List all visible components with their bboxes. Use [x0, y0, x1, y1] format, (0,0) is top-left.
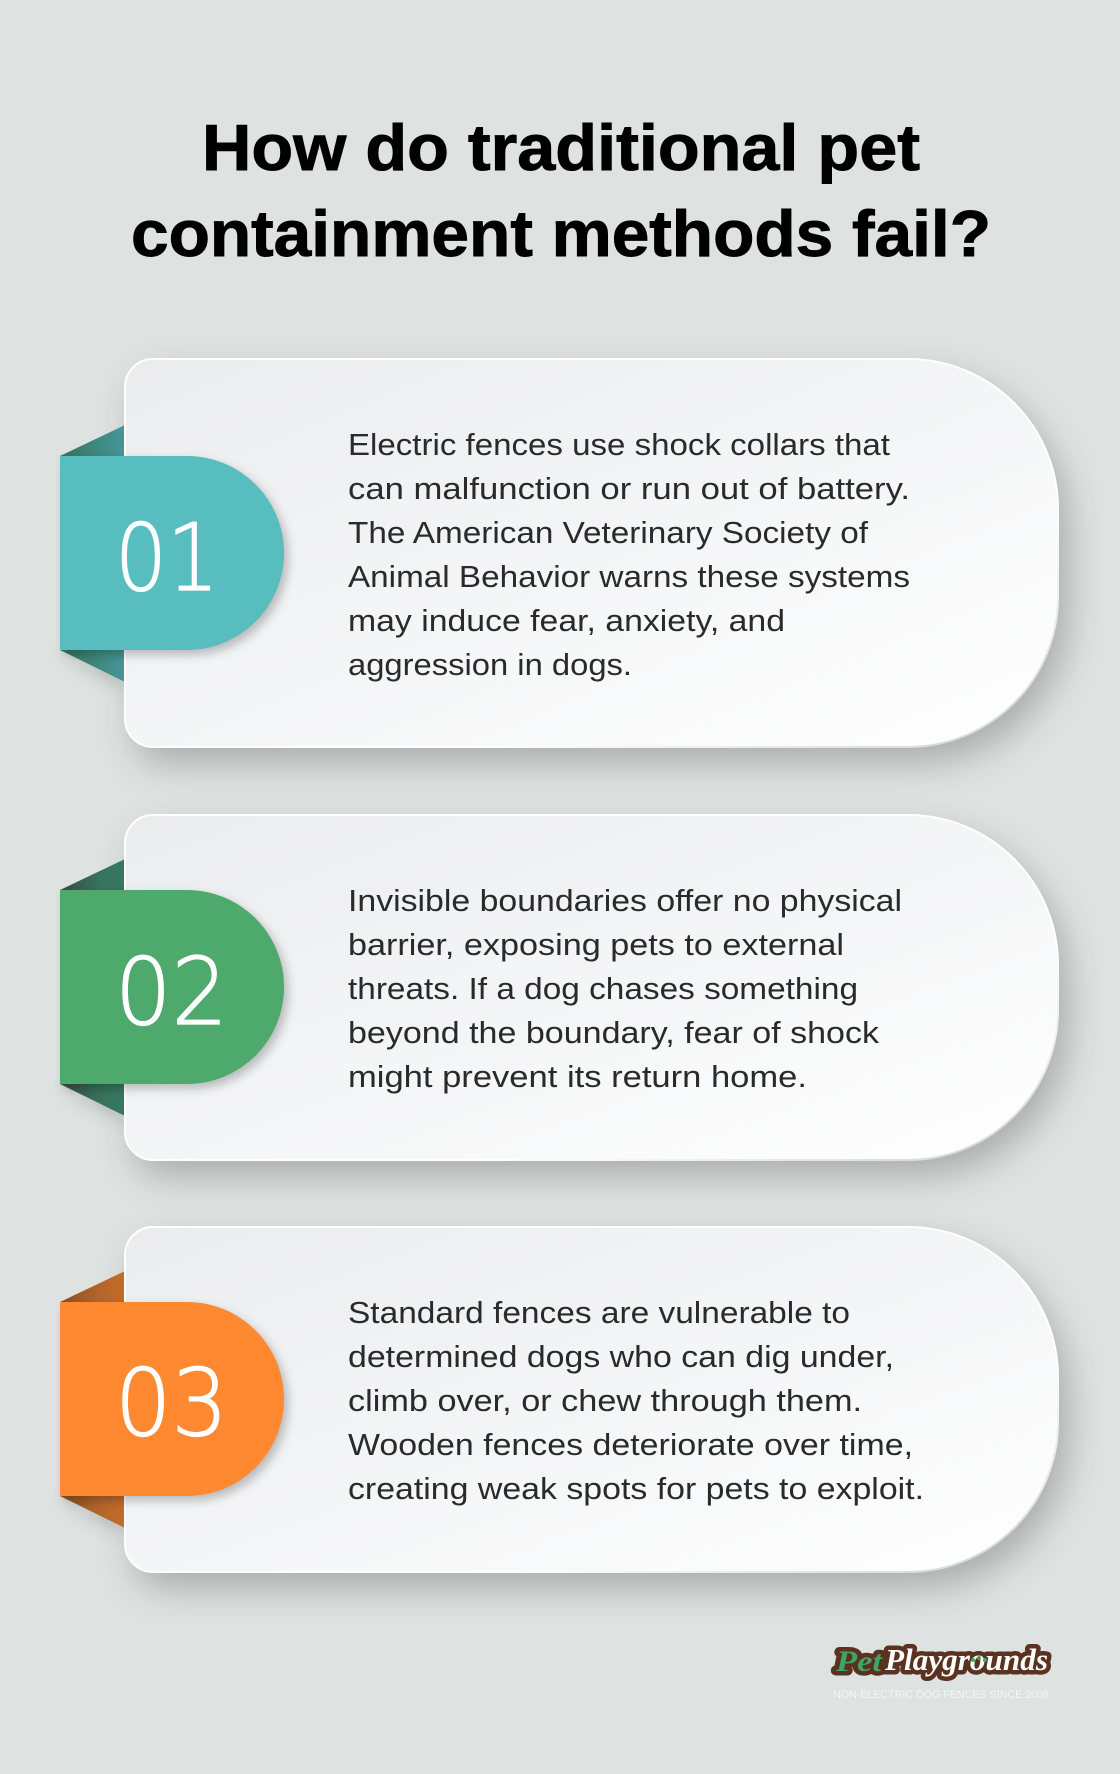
text: step 3 description: climb over, or chew through them.	[348, 1383, 862, 1418]
badge 01	[60, 456, 284, 650]
icon: folded ribbon behind badge 03	[60, 1271, 125, 1528]
title: containment methods fail?	[131, 197, 991, 270]
card 3	[125, 1227, 1058, 1572]
panel: step 1 electric fences	[60, 359, 1068, 763]
panel: step 3 standard fences	[60, 1227, 1068, 1588]
text: step 3 description: Standard fences are vulnerable to	[348, 1295, 850, 1330]
text: step 2 description: Invisible boundaries offer no physical	[348, 883, 902, 918]
icon: paw print	[971, 1656, 987, 1662]
badge 01: 01	[115, 504, 219, 612]
text: step 2 description: barrier, exposing pets to external	[348, 927, 844, 962]
badge 02: 02	[115, 938, 228, 1046]
logo: Pet Playgrounds	[833, 1642, 1049, 1701]
text: step 3 description	[348, 1295, 924, 1506]
icon: folded ribbon behind badge 01	[60, 425, 125, 682]
card 2	[125, 815, 1058, 1160]
title: How do traditional pet	[202, 111, 920, 184]
text: step 1 description: The American Veterinary Society of	[348, 515, 868, 550]
text: step 2 description: threats. If a dog chases something	[348, 971, 858, 1006]
text: step 1 description: Electric fences use shock collars that	[348, 427, 890, 462]
text: step 2 description	[348, 883, 902, 1094]
text: step 1 description: can malfunction or run out of battery.	[348, 471, 910, 506]
text: step 1 description: Animal Behavior warns these systems	[348, 559, 910, 594]
logo: Pet Playgrounds: Playgrounds	[884, 1642, 1048, 1677]
text: step 3 description: creating weak spots for pets to exploit.	[348, 1471, 924, 1506]
card 1	[125, 359, 1058, 747]
text: step 3 description: determined dogs who can dig under,	[348, 1339, 894, 1374]
title	[131, 111, 991, 270]
tagline: NON-ELECTRIC DOG FENCES SINCE 2008	[833, 1689, 1049, 1701]
icon: folded ribbon behind badge 02	[60, 859, 125, 1116]
badge 03: 03	[115, 1349, 228, 1457]
text: step 1 description: may induce fear, anxiety, and	[348, 603, 785, 638]
text: step 3 description: Wooden fences deteriorate over time,	[348, 1427, 913, 1462]
panel: step 2 invisible boundaries	[60, 815, 1068, 1176]
logo: Pet Playgrounds: Pet	[835, 1645, 884, 1678]
text: step 2 description: beyond the boundary, fear of shock	[348, 1015, 880, 1050]
badge 03	[60, 1302, 284, 1496]
badge 02	[60, 890, 284, 1084]
text: step 1 description	[348, 427, 910, 682]
text: step 1 description: aggression in dogs.	[348, 647, 632, 682]
text: step 2 description: might prevent its return home.	[348, 1059, 807, 1094]
